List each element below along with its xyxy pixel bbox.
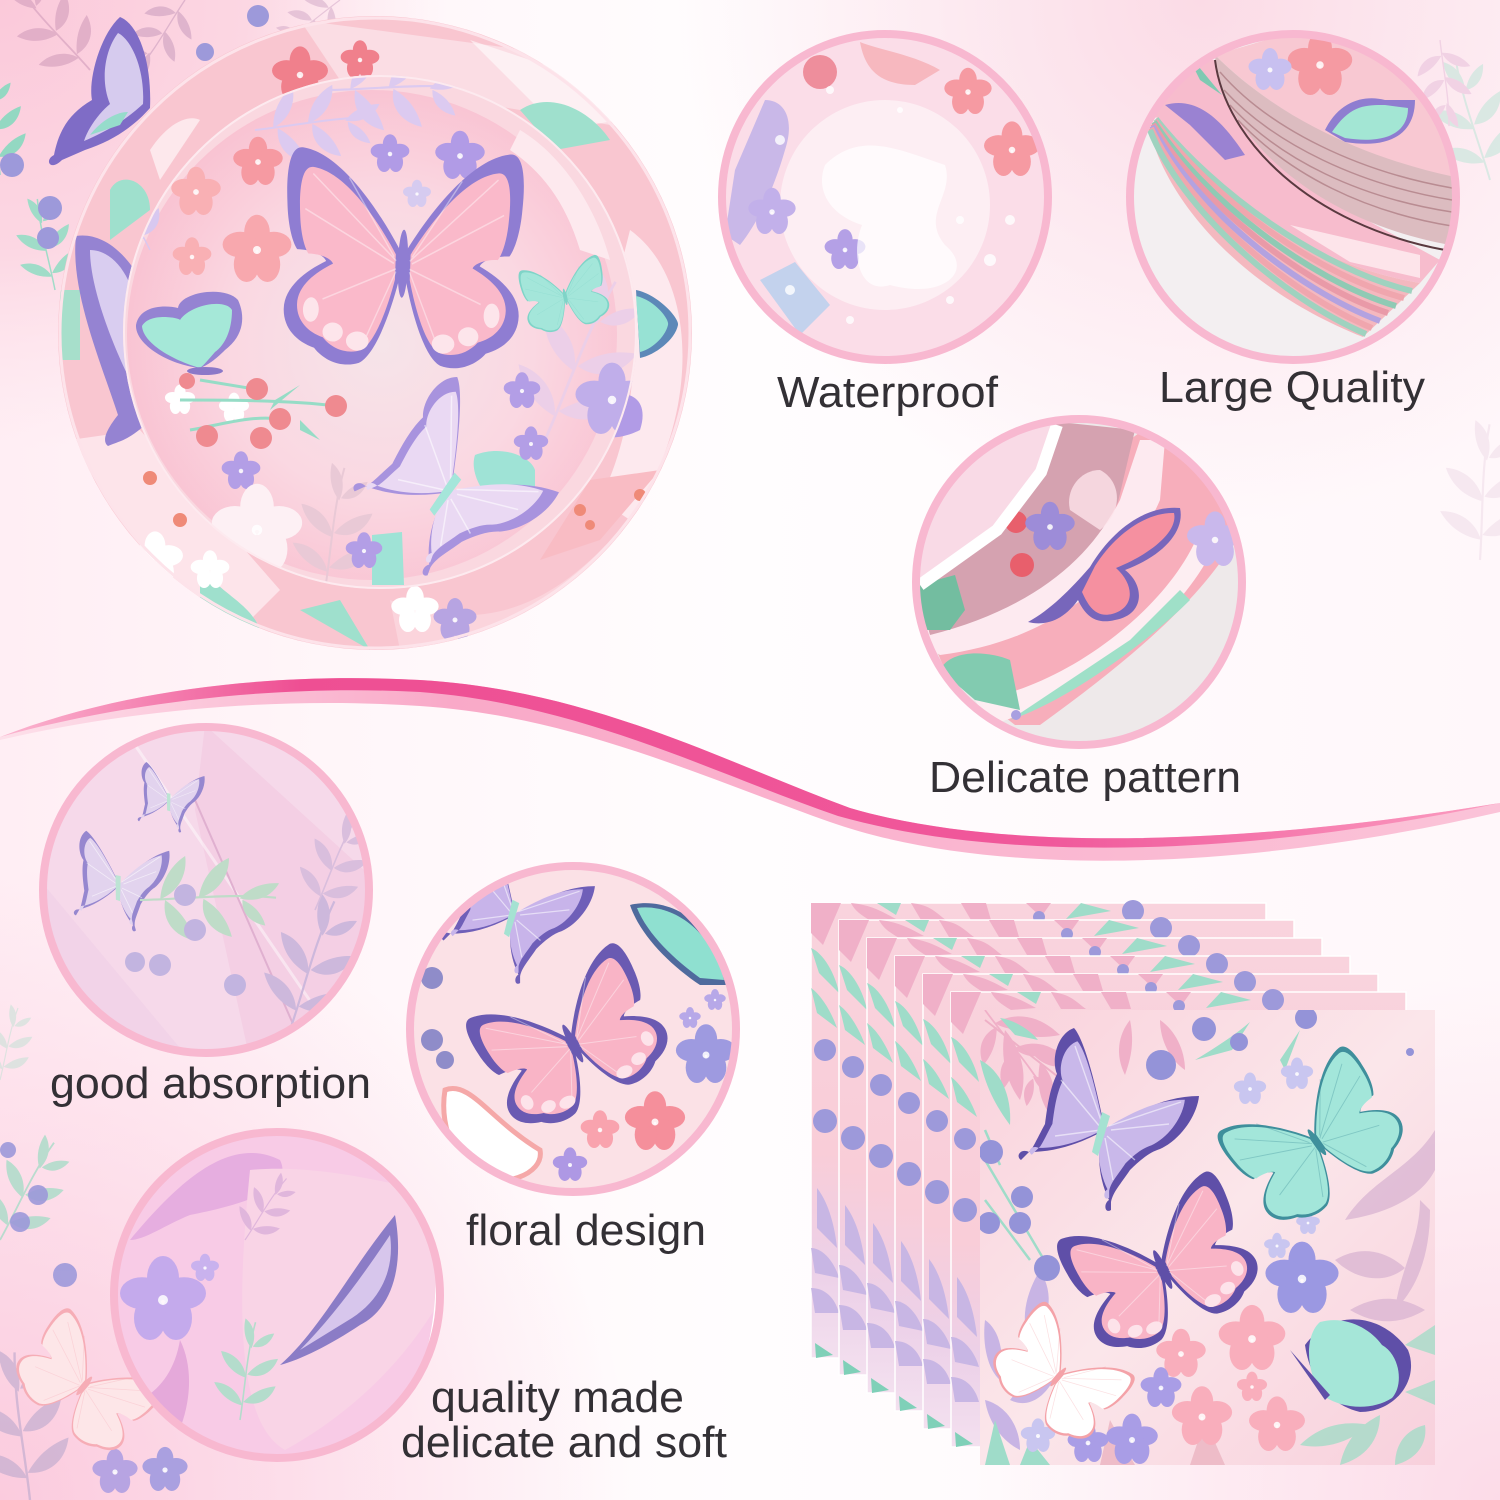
napkin berries [978,1007,1414,1281]
caption: quality made delicate and soft: delicate and soft [401,1418,727,1467]
plate leaf decorations [78,24,650,592]
panel: large quality [1128,30,1470,412]
plate flowers [165,131,649,572]
decorative leaves top right [1403,33,1500,565]
caption: waterproof: Waterproof [777,368,999,417]
caption: quality made delicate and soft: quality made [431,1373,684,1422]
caption: floral design: floral design [466,1206,706,1255]
panel: waterproof [720,32,1050,417]
ring [1130,34,1456,360]
upper plate surface [1218,38,1450,176]
napkin flowers [1021,1058,1339,1464]
plate stack image [1134,38,1452,356]
large pink butterfly [281,147,525,371]
second plate [915,440,1165,655]
napkin stack layers [811,900,1406,1447]
upper stack side [1215,55,1460,245]
folded napkin image [40,725,375,1060]
butterfly close-up image [414,870,732,1188]
front napkin [954,991,1435,1465]
panel: good absorption [40,725,375,1108]
caption: quality made delicate and soft [401,1373,727,1467]
mint butterfly left [136,292,242,375]
top rim [920,426,1050,578]
panel: large and small plates [58,16,692,652]
three plates image [920,423,1238,741]
ring [114,1132,440,1458]
napkin foliage [954,991,1435,1465]
panel: delicate pattern [905,410,1244,802]
ring [410,866,736,1192]
mint butterfly right [518,254,610,332]
napkin butterflies [1019,1028,1199,1211]
ring [916,419,1242,745]
caption: large quality: Large Quality [1159,363,1425,412]
butterfly on lower plate [1028,508,1181,623]
large plate [58,16,692,652]
panel: quality made [112,1130,727,1467]
wave divider [0,678,1500,861]
ring [43,727,369,1053]
panel: stacked napkins [811,900,1435,1465]
icon: purple butterfly top left [49,17,150,165]
plate berries and stems [179,373,347,449]
lower plate surface [1150,60,1440,283]
water puddle [822,146,957,289]
panel: floral design [408,828,738,1255]
waterproof image [720,32,1050,362]
decorative leaves and berries top left [0,0,353,299]
ring [722,34,1048,360]
small plate [123,75,635,589]
bottom butterfly [353,377,559,576]
caption: good absorption: good absorption [50,1059,371,1108]
napkin curl image [112,1130,445,1460]
decorative leaves and butterfly bottom left [0,1004,188,1500]
caption: delicate pattern: Delicate pattern [929,753,1241,802]
lower stack side [1150,117,1420,337]
